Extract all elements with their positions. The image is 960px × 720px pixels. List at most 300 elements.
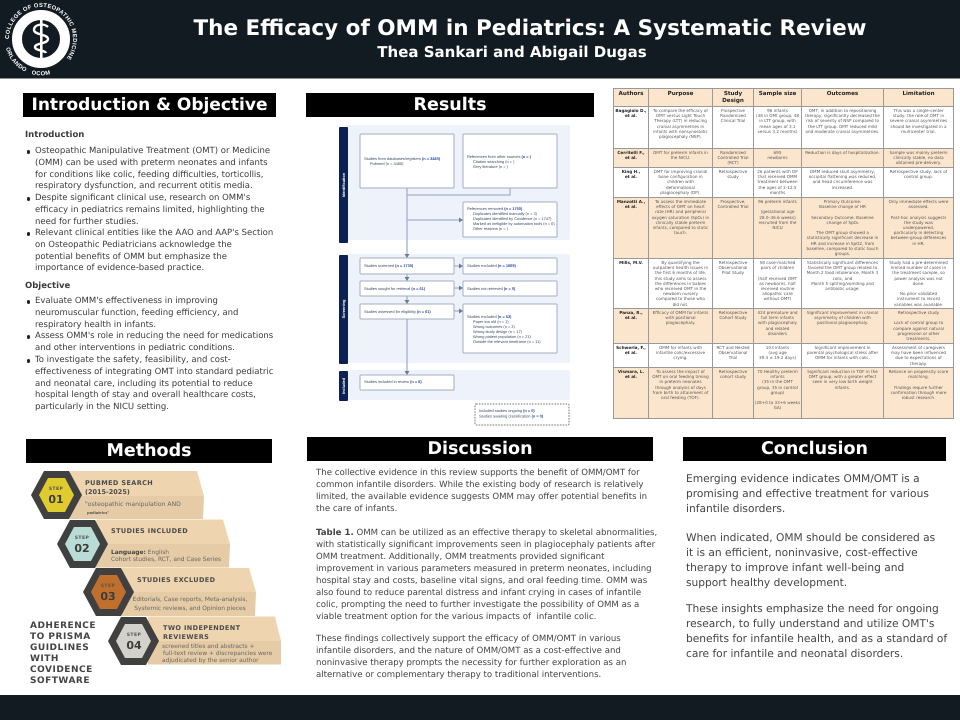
table: summary of included studies: instrument to record [897,296,940,301]
step 1: 01 [48,493,64,506]
table: summary of included studies: months [770,190,785,195]
table: summary of included studies: plagiocephaly (NSP). [659,134,702,139]
flowchart: PRISMA diagram: Duplicates identified by Covidence (n = 1747) [473,216,552,221]
heading: conclusion: Conclusion [761,439,868,459]
footer band [0,695,960,720]
table: summary of included studies: Study had a pre-determined [889,260,948,265]
text block: introduction and objective: Introduction [25,130,84,140]
flowchart: PRISMA diagram [339,125,570,425]
table: summary of included studies: study; the role of OMT in [893,113,944,118]
table: summary of included studies: Retrospective [719,310,747,315]
icon: college logo: OCOM [32,70,50,76]
callout: PRISMA adherence: TO PRISMA [30,632,91,642]
flowchart: PRISMA diagram: Grey literature (n = ) [473,164,509,169]
text block: conclusion: infantile disorders. [686,502,785,514]
callout: PRISMA adherence [30,621,96,686]
text block: conclusion: therapy to improve infant well-being and [686,560,904,574]
flowchart: PRISMA diagram: Studies screened (n = 1730) [364,263,414,268]
table: summary of included studies: Lack of control group to [894,320,943,325]
table: summary of included studies: (35 in the OMT [762,379,793,384]
step 4: screened titles and abstracts + [162,643,254,650]
table: summary of included studies [613,88,954,419]
table: summary of included studies: Trial [729,355,737,360]
step 3: STUDIES EXCLUDED [137,576,216,584]
table: summary of included studies: clinically stable, no data [893,155,944,160]
table: summary of included studies: newborn nursery [663,291,698,296]
table: summary of included studies: Controlled Trial [717,204,749,209]
table: summary of included studies: (avg age [768,350,787,355]
table: summary of included studies: et al. [625,350,637,355]
text block: discussion: viable treatment option for the various impacts of infantile colic. [316,612,596,622]
table: summary of included studies: Significant improvement in cranial [807,310,878,315]
table: summary of included studies: Controlled Trial [717,155,749,160]
table: summary of included studies: 96 infants [767,108,788,113]
table: summary of included studies: Findings require further [894,385,943,390]
flowchart: PRISMA diagram: Other reasons (n = ) [473,226,509,231]
table: summary of included studies: Month 2 food intolerance, Month 3 [807,270,878,275]
table: summary of included studies: (48 in OMt group, 48 [756,113,799,118]
table: summary of included studies: et al. [625,155,637,160]
text block: introduction and objective: and neonatal care, including its potential to reduce [35,378,253,388]
step 4: REVIEWERS [163,633,209,641]
table: summary of included studies: Mills, M.V. [619,260,643,265]
table: summary of included studies: the NICU. [671,155,690,160]
table: summary of included studies: By quantifying the [661,260,700,265]
table: summary of included studies: robust research. [902,395,935,400]
text block: discussion: the care of infants. [316,504,397,514]
text block: conclusion: care for infantile and neonatal disorders. [686,646,903,660]
table: summary of included studies: Randomized [720,150,746,155]
text block: discussion: noninvasive therapy prompts the necessity for further exploration as an [316,658,626,668]
table: summary of included studies: Pilot Study [722,270,744,275]
table: summary of included studies: change of SpO₂ [826,220,859,225]
table: summary of included studies: GA) [774,405,781,410]
text block: introduction and objective: Assess OMM's role in reducing the need for medications [35,331,273,341]
text block: introduction and objective: need for further studies. [35,216,139,226]
table: summary of included studies: matching. [908,374,929,379]
step 2: STUDIES INCLUDED [111,527,188,535]
callout: PRISMA adherence: GUIDLINES [30,643,89,653]
table: summary of included studies: Outcomes [827,91,858,97]
table: summary of included studies: infants, compared to static [653,225,708,230]
step 1: "osteopathic manipulation AND [85,501,181,508]
table: summary of included studies: therapy. [910,361,927,366]
table: summary of included studies: Reduction is days of hospitalization. [805,150,880,155]
table: summary of included studies: treatments. [906,336,931,341]
table: summary of included studies: Baseline change of HR [819,204,866,209]
table: summary of included studies: Retrospective study [898,310,939,315]
table: summary of included studies: multicenter trial. [901,129,936,134]
table: summary of included studies: 103 infants [766,345,789,350]
table: summary of included studies: et al. [625,174,637,179]
text block: introduction and objective: particularly in the NICU setting. [35,402,169,412]
table: summary of included studies: in LTT group, with [759,118,796,123]
table: summary of included studies: Manzotti A., [617,199,645,204]
table: summary of included studies: infants [770,374,785,379]
text block: introduction and objective: respiratory health in infants. [35,320,156,330]
table: summary of included studies: therapy, significantly decreased the [805,113,880,118]
table: summary of included studies: (RCT) [727,160,739,165]
table: summary of included studies: as newborns, half [759,281,796,286]
table: summary of included studies: OMT for preterm infants in [653,150,708,155]
step 1 [31,471,204,519]
step 4: 04 [126,639,142,652]
table: summary of included studies: mean ages of 3.1 [759,124,796,129]
text block: introduction and objective: Evaluate OMM's effectiveness in improving [35,296,218,306]
table: summary of included studies: Statistically significant differences [807,260,878,265]
flowchart: PRISMA diagram: Studies excluded (n = 53) [467,314,512,319]
table: summary of included studies: touch. [674,230,687,235]
table: summary of included studies: obtained pre-delivery. [896,160,941,165]
text block: discussion: The collective evidence in this review supports the benefit of OMM/OMT for [316,468,640,478]
table: summary of included studies: oxygen saturation (SpO₂) in [652,215,709,220]
step 2 [57,520,230,568]
table: summary of included studies: RCT and Nested [716,345,750,350]
table: summary of included studies: infants with nonsynostotic [653,129,708,134]
step 2: Cohort studies, RCT, and Case Series [111,556,221,563]
table: summary of included studies: (28+0 to 33+6 weeks [755,400,800,405]
table: summary of included studies: 424 premature and [757,310,798,315]
text block: discussion: colic, prompting the need to further investigate the possibility of OMM as a [316,600,639,610]
text block: introduction and objective: efficacy in pediatrics remains limited, highlighting the [35,205,265,215]
table: summary of included studies: antibiotic usage. [825,286,860,291]
heading: conclusion [683,437,946,461]
step 2: 02 [74,542,90,555]
flowchart: PRISMA diagram: Duplicates identified manually (n = 3) [473,211,538,216]
table: summary of included studies: positional plagiocephaly. [817,320,868,325]
table: summary of included studies: Significant reduction in TOF in the [807,369,878,374]
title: The Efficacy of OMM in Pediatrics: A Systematic Review [193,16,867,41]
table: summary of included studies: should be investigated in a [890,124,947,129]
tab: identification [339,127,348,243]
table: summary of included studies: To compare the efficacy of [653,108,708,113]
flowchart: PRISMA diagram: Wrong outcomes (n = 3) [473,324,515,329]
table: summary of included studies: et al. [625,374,637,379]
table: summary of included studies: Retrospective [719,169,747,174]
table: summary of included studies: Secondary Outcome: Baseline [811,215,874,220]
table: summary of included studies: seen in very low birth weight [812,379,873,384]
table: summary of included studies: in preterm neonates [659,379,702,384]
heading: discussion [307,437,653,461]
table: summary of included studies: versus 3.2 months) [757,129,798,134]
table: summary of included studies: from birth to attainment of [653,390,708,395]
text block: discussion: These findings collectively support the efficacy of OMM/OMT in various [316,634,621,644]
table: summary of included studies: treatment between [758,179,798,184]
table: summary of included studies: occipital flattening was reduced, [809,174,876,179]
table: summary of included studies: did not. [673,302,688,307]
table: summary of included studies: crying. [673,355,688,360]
icon: college logo: COLLEGE OF OSTEOPATHIC MEDICINE [5,2,78,60]
table: summary of included studies: Month 5 spitting/vomiting and [811,281,874,286]
table: summary of included studies: compare against natural [893,326,944,331]
flowchart: PRISMA diagram: Studies awaiting classification (n = 0) [479,414,544,418]
text block: introduction and objective: neuromuscular function, feeding efficiency, and [35,308,238,318]
table: summary of included studies: the treatment sample, so [892,270,945,275]
text block: introduction and objective: for conditions like colic, feeding difficulties, torticollis, [35,170,263,180]
table: summary of included studies: NICU [772,225,783,230]
text block: discussion: improvement in various parameters measured in preterm neonates, including [316,564,652,574]
table: summary of included studies: Bagagiolo D., [615,108,647,113]
table: summary of included studies: Vismara, L. [618,369,644,374]
table: summary of included studies: OMM reduced skull asymmetry, [810,169,875,174]
callout: PRISMA adherence: SOFTWARE [30,676,90,686]
table: summary of included studies: variables was available. [894,302,943,307]
table: summary of included studies: asymmetry of children with [814,315,871,320]
flowchart: PRISMA diagram: Studies included in review (n = 8) [364,379,422,384]
table: summary of included studies: between-group differences [891,235,946,240]
text block: discussion: common infantile disorders. While the existing body of research is relatively [316,480,644,490]
table: summary of included studies: disorders [768,331,787,336]
text block: conclusion: research, to fully understand and utilize OMT's [686,616,934,630]
table: summary of included studies: deformational [666,185,695,190]
text block: introduction and objective: Relevant clinical entities like the AAO and AAP's Section [35,228,273,238]
table: summary of included studies: Therapy (LTT) in reducing [654,118,707,123]
table: summary of included studies: underpowered, [903,225,934,230]
table: summary of included studies: Prospective, [720,199,746,204]
table: summary of included studies: Cerritelli F., [617,150,645,155]
table: summary of included studies: group) [771,390,784,395]
step 3: STEP [101,583,116,589]
callout: PRISMA adherence: WITH [30,654,59,664]
table: summary of included studies: (half received OMT [758,276,797,281]
table: summary of included studies: Only immediate effects were [889,199,948,204]
table: summary of included studies: in HR. [912,241,925,246]
table: summary of included studies: Limitation [902,91,935,97]
table: summary of included studies: statistically significant decrease in [807,235,878,240]
text block: discussion: hospital stay and costs, baseline vital signs, and oral feeding time. OMM was [316,576,647,586]
step 4: TWO INDEPENDENT [163,624,241,632]
heading: discussion: Discussion [427,439,533,459]
table: summary of included studies: the differences in babies [655,281,706,286]
table: summary of included studies: 96 preterm infants [758,199,797,204]
table: summary of included studies: without OMT) [764,296,791,301]
text block: introduction and objective: and other interventions in pediatric conditions. [35,343,235,353]
text block: discussion: alternative or complementary therapy to traditional interventions. [316,670,601,680]
text block: conclusion: support healthy development. [686,576,847,588]
table: summary of included studies: recruited from the [759,220,796,225]
table: summary of included studies: infants. [835,385,850,390]
table: summary of included studies: OMM for infants with colic. [815,355,870,360]
heading: methods [26,439,272,463]
text block: introduction and objective: To investigate the safety, feasibility, and cost- [35,355,231,365]
table: summary of included studies: cohort study [720,374,746,379]
table: summary of included studies: rate (HR) and peripheral [655,209,706,214]
table: summary of included studies: Observational [719,265,747,270]
table: summary of included studies: due to expectations of [895,355,942,360]
table: summary of included studies: Significant improvement in [814,345,871,350]
table: summary of included studies: OMT versus Light Touch [656,113,705,118]
table: summary of included studies: Purpose [668,91,693,97]
flowchart: PRISMA diagram: Studies not retrieved (n = 0) [467,286,516,291]
flowchart: PRISMA diagram: Pubmed (n = 3480) [370,161,404,166]
text block: discussion: infantile disorders, and the nature of OMM/OMT as a cost-effective and [316,646,621,656]
step 1: STEP [49,486,64,492]
table: summary of included studies: To assess the immediate [655,199,706,204]
table: summary of included studies: control group. [904,174,933,179]
step 1: PUBMED SEARCH [85,479,153,487]
flowchart: PRISMA diagram: References from other sources (n = ) [467,154,532,159]
flowchart: PRISMA diagram: Studies excluded (n = 1669) [467,263,516,268]
table: summary of included studies: oral feeding (TOF). [661,395,700,400]
table: summary of included studies: pairs of children [761,265,794,270]
table: summary of included studies: Study [724,91,742,97]
flowchart: PRISMA diagram: Studies assessed for eligibility (n = 61) [364,309,431,314]
table: summary of included studies: King H., [622,169,640,174]
step 4: adjudicated by the senior author [162,657,259,664]
text block: conclusion: it is an efficient, noninvasive, cost-effective [686,546,918,558]
text block: discussion: limited, the available evidence suggests OMM may offer potential benefits in [316,492,647,502]
table: summary of included studies: Design [722,98,744,104]
step 3 [83,568,256,616]
heading: results [306,93,594,117]
table: summary of included studies: groups. [835,251,850,256]
step 4: full-text review + discrepancies were [163,650,273,657]
authors: Thea Sankari and Abigail Dugas [377,43,647,61]
text block: introduction and objective: importance of evidence-based practice. [35,263,204,273]
flowchart: PRISMA diagram: Outside the relevant timeframe (n = 11) [473,339,541,344]
table: summary of included studies: Efficacy of OMM for infants [653,310,708,315]
table: summary of included studies: Cohort Study [719,315,747,320]
table: summary of included studies: OMT for improving cranial [654,169,707,174]
table: summary of included studies: progression or other [897,331,940,336]
table: summary of included studies: 58 case-matched [760,260,795,265]
text block: introduction and objective: (OMM) can be used with preterm neonates and infants [35,158,268,168]
table: summary of included studies: effects of OMT on heart [656,204,705,209]
table: summary of included studies: full term infants [761,315,794,320]
callout: PRISMA adherence: ADHERENCE [30,621,96,631]
text block: introduction and objective: on Osteopathic Pediatricians acknowledge the [35,240,232,250]
flowchart: PRISMA diagram: Marked as ineligible by automation tools (n = 0) [473,221,555,226]
text block: discussion: OMM treatment. Additionally, OMM treatments provided significant [316,552,604,562]
table: summary of included studies: The OMT group showed a [816,230,869,235]
text block: conclusion [686,472,948,660]
heading: introduction and objective: Introduction & Objective [32,95,267,115]
table: summary of included studies: Authors [619,91,643,97]
table: summary of included studies: that received OMM [758,174,797,179]
text block: conclusion: When indicated, OMM should be considered as [686,530,935,544]
table: summary of included studies: confirmation through more [891,390,946,395]
table: summary of included studies: Sample size [759,91,796,97]
text block: conclusion: promising and effective treatment for various [686,486,929,500]
text block: introduction and objective: Osteopathic Manipulative Treatment (OMT) or Medicine [35,146,270,156]
table: summary of included studies: et al. [625,204,637,209]
text block: introduction and objective: Objective [25,281,70,291]
table: summary of included studies: Primary Outcome: [824,199,861,204]
step 3: 03 [100,590,116,603]
table: summary of included studies: OMT on oral feeding timing [652,374,709,379]
flowchart: PRISMA diagram: Wrong study design (n = 17) [473,329,523,334]
table: summary of included studies: OMT group, with a greater effect [809,374,876,379]
table: summary of included studies: Prospective [721,108,745,113]
flowchart: PRISMA diagram: References removed (n = 1750) [467,206,523,211]
table: summary of included studies: severe cranial asymmetries [890,118,947,123]
flowchart: PRISMA diagram: Included studies ongoing (n = 0) [479,408,535,413]
table: summary of included studies: newborns [767,155,788,160]
step 4: STEP [127,632,142,638]
text block: conclusion: benefits for infantile health, and as a standard of [686,632,947,644]
table: summary of included studies: assessed. [908,204,929,209]
tab: included [339,371,348,401]
table: summary of included studies: 28.0–36.6 weeks) [759,215,796,220]
step 1: pediatrics" [87,511,109,515]
table: summary of included studies: Panza, R., [619,310,643,315]
table: summary of included studies: received routine [761,286,794,291]
table: summary of included studies: group, 35 in control [757,385,798,390]
table: summary of included studies: risk of severity of NSP compared to [806,118,879,123]
table: summary of included studies: and related [766,326,789,331]
table: summary of included studies: the ages of 2-12.5 [759,185,796,190]
steps: methods ribbon [31,471,281,665]
table: summary of included studies: children with [667,179,694,184]
table: summary of included studies: infantile colic/excessive [656,350,705,355]
table: summary of included studies: et al. [625,113,637,118]
table: summary of included studies: Sample was mainly preterm [889,150,948,155]
table: summary of included studies: the study was [904,220,933,225]
table: summary of included studies: may have been influenced [891,350,946,355]
table: summary of included studies: done. [913,281,924,286]
table: summary of included studies: plagiocephaly (DP). [660,190,701,195]
table: summary of included studies: Post-hoc analysis suggests [891,215,946,220]
tab: screening: Screening [341,299,346,318]
table: summary of included studies: To assess the impact of [656,369,705,374]
table: summary of included studies: the LTT group. OMT reduced mild [808,124,877,129]
table: summary of included studies: 39.4 ± 19.2 days) [759,355,796,360]
table: summary of included studies: particularly in detecting [894,230,943,235]
table: summary of included studies: Retrospective study, lack of [890,169,947,174]
table: summary of included studies: Schwerla, F., [616,345,646,350]
text block: conclusion: These insights emphasize the need for ongoing [686,602,939,614]
table: summary of included studies: Retrospective [719,260,747,265]
table: summary of included studies: limited number of cases in [891,265,946,270]
table: summary of included studies: No prior validated [900,291,937,296]
table: summary of included studies: outpatient health issues in [653,265,708,270]
text block: introduction and objective: Despite significant clinical use, research on OMM's [35,193,250,203]
flowchart: PRISMA diagram: Studies sought for retrieval (n = 61) [364,286,426,291]
table: summary of included studies: compared to those who [656,296,705,301]
table: summary of included studies: Randomized [720,113,746,118]
table: summary of included studies: Reliance on propensity score [889,369,948,374]
text block: introduction and objective [25,130,273,412]
table: summary of included studies: et al. [625,315,637,320]
table: summary of included studies: Assessment of caregivers [892,345,945,350]
table: summary of included studies: 26 patients with DP [757,169,798,174]
tab: screening [339,255,348,364]
table: summary of included studies: cranial asymmetries in [657,124,704,129]
table: summary of included studies: 695 [774,150,781,155]
step 2: STEP [75,535,90,541]
table: summary of included studies: the first 6 months of life, [655,270,706,275]
table: summary of included studies: parental psychological stress after [807,350,878,355]
table: summary of included studies: with plagiocephaly [758,320,797,325]
heading: results: Results [414,95,486,115]
text block: introduction and objective: respiratory dysfunction, and recurrent otitis media. [35,181,253,191]
table: summary of included studies: Clinical Trial [721,118,745,123]
header band [0,0,960,79]
flowchart: PRISMA diagram: Studies from databases/registers (n = 3480) [364,156,441,161]
table: summary of included studies: colic, and [833,276,852,281]
heading: methods: Methods [106,441,192,461]
table: summary of included studies: bone configuration in [658,174,703,179]
table: summary of included studies: baseline, compared to static touch [807,246,878,251]
table: summary of included studies: Retrospective [719,369,747,374]
table: summary of included studies: OMM for infants with [659,345,702,350]
table: summary of included studies: who received OMT in the [655,286,706,291]
text block: introduction and objective: hospital length of stay and overall healthcare costs, [35,390,256,400]
flowchart: PRISMA diagram: Wrong patient population (n = 21) [473,334,531,339]
flowchart: PRISMA diagram: Citation searching (n = ) [473,159,515,164]
text block: introduction and objective: effectiveness of integrating OMT into standard pediatric [35,367,273,377]
table: summary of included studies: favored the OMT group related to [808,265,877,270]
